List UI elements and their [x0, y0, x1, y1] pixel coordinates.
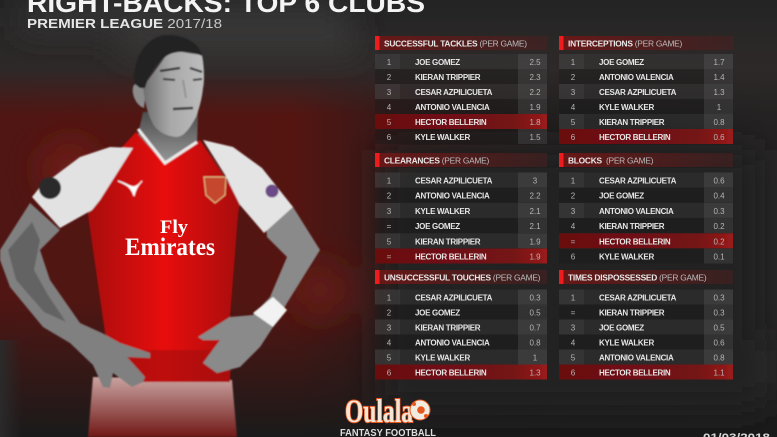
heading: times dispossessed: TIMES DISPOSSESSED (PER GAME) [568, 272, 707, 282]
icon: football [410, 400, 430, 420]
table rows: unsuccessful touches: 4 [387, 338, 392, 348]
table rows: unsuccessful touches: HECTOR BELLERIN [415, 368, 487, 378]
table rows: interceptions: ANTONIO VALENCIA [599, 73, 674, 82]
table rows: interceptions: KYLE WALKER [599, 103, 654, 112]
table rows: successful tackles: 6 [387, 133, 392, 142]
table rows: successful tackles: 5 [387, 118, 392, 127]
table rows: interceptions: JOE GOMEZ [599, 58, 644, 67]
table rows: successful tackles: HECTOR BELLERIN [415, 118, 487, 127]
table rows: successful tackles: 1.5 [529, 133, 541, 142]
table rows: times dispossessed: 6 [571, 368, 576, 378]
table rows: clearances: 1.9 [529, 237, 541, 246]
heading: clearances: CLEARANCES (PER GAME) [384, 156, 489, 166]
table rows: clearances: KYLE WALKER [415, 207, 470, 216]
table rows: clearances: 3 [533, 176, 538, 186]
hair [134, 35, 202, 88]
table rows: blocks: KYLE WALKER [599, 252, 654, 262]
table rows: interceptions: 2 [571, 73, 576, 82]
table rows: times dispossessed: CESAR AZPILICUETA [599, 294, 677, 302]
table rows: times dispossessed: 1.1 [713, 368, 725, 378]
table rows: unsuccessful touches: 5 [387, 354, 392, 362]
table rows: times dispossessed: = [571, 308, 576, 318]
table rows: times dispossessed: 1 [571, 294, 576, 302]
right sleeve [203, 140, 293, 233]
table rows: blocks: 0.3 [713, 207, 725, 216]
table rows: successful tackles: ANTONIO VALENCIA [415, 103, 490, 112]
shirt sponsor: Fly Emirates: Emirates [125, 234, 215, 261]
table rows: times dispossessed: ANTONIO VALENCIA [599, 354, 674, 362]
table rows: times dispossessed: KIERAN TRIPPIER [599, 308, 665, 318]
red shirt body [88, 132, 240, 382]
table rows: clearances: 5 [387, 237, 392, 246]
table rows: unsuccessful touches: 1.3 [529, 368, 541, 378]
table rows: successful tackles: CESAR AZPILICUETA [415, 88, 493, 97]
table rows: clearances: = [387, 252, 392, 262]
table rows: blocks: KIERAN TRIPPIER [599, 222, 665, 231]
table rows: clearances: 2.1 [529, 207, 541, 216]
table rows: blocks: CESAR AZPILICUETA [599, 176, 677, 186]
table rows: interceptions: 1.3 [713, 88, 725, 97]
table rows: unsuccessful touches: CESAR AZPILICUETA [415, 294, 493, 302]
table rows: unsuccessful touches: 0.5 [529, 308, 541, 318]
ear [133, 84, 146, 108]
table rows: interceptions: 5 [571, 118, 576, 127]
table rows: unsuccessful touches: KYLE WALKER [415, 354, 470, 362]
table rows: clearances: 3 [387, 207, 392, 216]
table rows: times dispossessed: 0.3 [713, 308, 725, 318]
table rows: clearances: KIERAN TRIPPIER [415, 237, 481, 246]
table rows: interceptions: 6 [571, 133, 576, 142]
table rows: blocks: ANTONIO VALENCIA [599, 207, 674, 216]
panel: times dispossessed [559, 270, 733, 380]
left sleeve [32, 147, 133, 228]
table rows: successful tackles: 2.3 [529, 73, 541, 82]
table rows: unsuccessful touches: KIERAN TRIPPIER [415, 324, 481, 332]
shirt collar [138, 129, 197, 163]
player photo: Hector Bellerin [0, 35, 320, 437]
table rows: successful tackles: 1 [387, 58, 392, 67]
table rows: interceptions: CESAR AZPILICUETA [599, 88, 677, 97]
table rows: blocks: 0.4 [713, 192, 725, 201]
heading: clearances [375, 153, 547, 167]
table rows: interceptions: 1 [717, 103, 722, 112]
table rows: unsuccessful touches: 3 [387, 324, 392, 332]
table rows: interceptions: 1.7 [713, 58, 725, 67]
table rows: clearances: 2.2 [529, 192, 541, 201]
table rows: successful tackles: 2 [387, 73, 392, 82]
table rows: unsuccessful touches: JOE GOMEZ [415, 308, 460, 318]
table rows: clearances: 1 [387, 176, 392, 186]
table rows: successful tackles: KYLE WALKER [415, 133, 470, 142]
table rows: unsuccessful touches: 6 [387, 368, 392, 378]
table rows: successful tackles: 3 [387, 88, 392, 97]
table rows: successful tackles: JOE GOMEZ [415, 58, 460, 67]
shirt sponsor: Fly Emirates [125, 217, 215, 261]
player left arm and hand [0, 203, 150, 388]
shirt sponsor: Fly Emirates: Fly [160, 217, 189, 238]
table rows: clearances: 1.9 [529, 252, 541, 262]
panel: successful tackles [375, 36, 547, 144]
table rows: times dispossessed: KYLE WALKER [599, 338, 654, 348]
table rows: interceptions: 1 [571, 58, 576, 67]
table rows: blocks: 1 [571, 176, 576, 186]
heading: blocks [559, 153, 733, 167]
panel: blocks [559, 153, 733, 264]
table rows: times dispossessed: 0.3 [713, 294, 725, 302]
table rows: clearances: 2.1 [529, 222, 541, 231]
heading: successful tackles [375, 36, 547, 50]
panel: interceptions [559, 36, 733, 144]
table rows: clearances: HECTOR BELLERIN [415, 252, 487, 262]
table rows: times dispossessed: 5 [571, 354, 576, 362]
player right arm and hand [198, 175, 320, 373]
table rows: unsuccessful touches: 0.8 [529, 338, 541, 348]
arm tattoos [8, 222, 66, 322]
table rows: successful tackles: KIERAN TRIPPIER [415, 73, 481, 82]
heading: interceptions: INTERCEPTIONS (PER GAME) [568, 38, 683, 48]
table rows: times dispossessed: 3 [571, 324, 576, 332]
table rows: interceptions: 4 [571, 103, 576, 112]
table rows: blocks: JOE GOMEZ [599, 192, 644, 201]
table rows: blocks [559, 172, 733, 264]
puma logo [118, 181, 142, 196]
table rows: unsuccessful touches: ANTONIO VALENCIA [415, 338, 490, 348]
heading: interceptions [559, 36, 733, 50]
table rows: interceptions: 0.8 [713, 118, 725, 127]
table rows: times dispossessed: JOE GOMEZ [599, 324, 644, 332]
table rows: times dispossessed: 4 [571, 338, 576, 348]
table rows: unsuccessful touches: 2 [387, 308, 392, 318]
table rows: times dispossessed: 0.8 [713, 354, 725, 362]
table rows: clearances [375, 172, 547, 264]
table rows: unsuccessful touches: 1 [387, 294, 392, 302]
shirt lower shadow [118, 350, 232, 382]
uefa patch [266, 184, 278, 198]
table rows: successful tackles [375, 54, 547, 144]
table rows: interceptions: 1.4 [713, 73, 725, 82]
table rows: clearances: CESAR AZPILICUETA [415, 176, 493, 186]
table rows: times dispossessed: HECTOR BELLERIN [599, 368, 671, 378]
table rows: clearances: = [387, 222, 392, 231]
table rows: unsuccessful touches: 1 [533, 354, 538, 362]
table rows: interceptions: 0.6 [713, 133, 725, 142]
table rows: blocks: HECTOR BELLERIN [599, 237, 671, 246]
table rows: successful tackles: 2.5 [529, 58, 541, 67]
face features [160, 68, 202, 109]
table rows: successful tackles: 2.2 [529, 88, 541, 97]
arsenal crest [204, 177, 226, 203]
table rows: blocks: 2 [571, 192, 576, 201]
panel: unsuccessful touches [375, 270, 547, 380]
table rows: blocks: 3 [571, 207, 576, 216]
table rows: blocks: = [571, 237, 576, 246]
table rows: interceptions: 3 [571, 88, 576, 97]
heading: successful tackles: SUCCESSFUL TACKLES (PER GAME) [384, 38, 527, 48]
table rows: blocks: 4 [571, 222, 576, 231]
table rows: interceptions [559, 54, 733, 144]
table rows: interceptions: KIERAN TRIPPIER [599, 118, 665, 127]
panel: clearances [375, 153, 547, 264]
heading: times dispossessed [559, 270, 733, 284]
table rows: blocks: 6 [571, 252, 576, 262]
table rows: clearances: JOE GOMEZ [415, 222, 460, 231]
neck [138, 112, 198, 165]
heading: blocks: BLOCKS (PER GAME) [568, 156, 654, 166]
table rows: blocks: 0.1 [713, 252, 725, 262]
table rows: times dispossessed: 0.5 [713, 324, 725, 332]
table rows: unsuccessful touches: 0.7 [529, 324, 541, 332]
table rows: clearances: 2 [387, 192, 392, 201]
heading: unsuccessful touches: UNSUCCESSFUL TOUCHES (PER GAME) [384, 272, 541, 282]
table rows: times dispossessed: 0.6 [713, 338, 725, 348]
heading: unsuccessful touches [375, 270, 547, 284]
table rows: successful tackles: 1.9 [529, 103, 541, 112]
table rows: blocks: 0.2 [713, 237, 725, 246]
table rows: unsuccessful touches: 0.3 [529, 294, 541, 302]
subtitle: PREMIER LEAGUE 2017/18 [27, 16, 222, 31]
wristband [253, 297, 287, 327]
table rows: unsuccessful touches [375, 290, 547, 380]
logo: Oulala Fantasy Football: Oulala [345, 394, 413, 430]
head [143, 50, 204, 137]
table rows: successful tackles: 1.8 [529, 118, 541, 127]
table rows: times dispossessed [559, 290, 733, 380]
table rows: interceptions: HECTOR BELLERIN [599, 133, 671, 142]
table rows: clearances: ANTONIO VALENCIA [415, 192, 490, 201]
table rows: blocks: 0.2 [713, 222, 725, 231]
table rows: blocks: 0.6 [713, 176, 725, 186]
table rows: successful tackles: 4 [387, 103, 392, 112]
player shorts [88, 377, 237, 437]
sleeve badge [39, 177, 61, 199]
